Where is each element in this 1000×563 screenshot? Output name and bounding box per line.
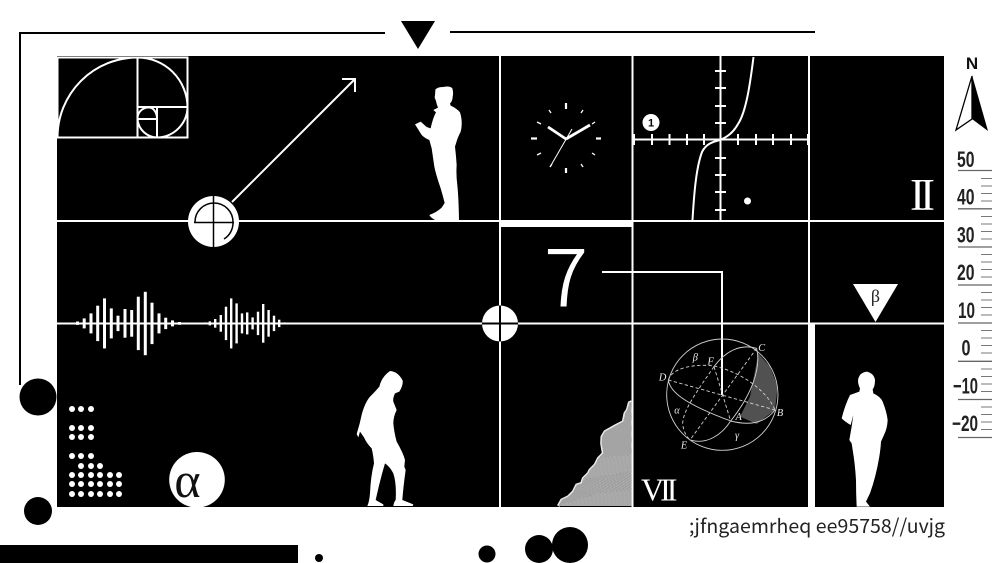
crosshair marker left xyxy=(188,196,239,247)
top right rule xyxy=(450,31,815,33)
triangle beta marker xyxy=(853,284,898,322)
temperature scale: 40 xyxy=(957,184,974,210)
temperature scale: −20 xyxy=(952,411,978,436)
clock icon xyxy=(531,103,601,173)
top triangle marker xyxy=(401,21,435,49)
caption code: ;jfngaemrheq ee95758//uvjg xyxy=(689,510,945,539)
main black panel xyxy=(57,56,944,507)
diagonal arrow xyxy=(232,79,355,202)
waveform xyxy=(76,292,286,355)
temperature scale xyxy=(952,147,992,438)
sphere point labels: E xyxy=(680,440,688,451)
graph dot xyxy=(744,198,751,204)
north compass xyxy=(956,54,988,131)
silhouette: man reading xyxy=(415,87,462,220)
spherical geometry diagram xyxy=(658,339,784,451)
roman numeral VII: VII xyxy=(641,472,677,508)
dot matrix xyxy=(69,406,122,497)
big number 7: 7 xyxy=(545,214,587,330)
triangle beta marker: β xyxy=(871,286,880,306)
temperature scale: 30 xyxy=(957,222,974,248)
temperature scale: 50 xyxy=(957,147,974,172)
temperature scale: 20 xyxy=(957,260,974,285)
north compass: N xyxy=(966,54,978,73)
function graph xyxy=(633,56,808,220)
top frame line and left drop xyxy=(20,33,385,385)
alpha badge xyxy=(169,452,225,508)
sphere point labels xyxy=(658,343,784,451)
crosshair marker centre xyxy=(482,306,518,342)
roman numeral II: II xyxy=(910,170,934,220)
temperature scale: 10 xyxy=(958,298,975,323)
silhouette: standing woman xyxy=(842,372,888,507)
temperature scale: 0 xyxy=(962,336,970,360)
graph point label xyxy=(642,114,660,131)
sphere point labels: α xyxy=(674,405,680,416)
decorative black circles xyxy=(20,378,588,563)
bottom black bar xyxy=(0,545,298,563)
temperature scale: −10 xyxy=(953,374,978,398)
golden spiral diagram xyxy=(58,58,188,138)
torn paper texture xyxy=(557,400,633,507)
sphere point labels: D xyxy=(658,373,667,384)
sphere point labels: γ xyxy=(735,431,740,442)
alpha badge: α xyxy=(174,452,201,508)
sphere point labels: F xyxy=(707,356,715,367)
silhouette: walking woman xyxy=(357,371,413,506)
sphere point labels: B xyxy=(777,408,784,419)
sphere point labels: A xyxy=(735,412,743,423)
graph point label: 1 xyxy=(648,118,654,130)
sphere point labels: C xyxy=(758,343,765,354)
sphere point labels: β xyxy=(692,353,699,364)
connector line from 7 to sphere xyxy=(602,272,722,395)
